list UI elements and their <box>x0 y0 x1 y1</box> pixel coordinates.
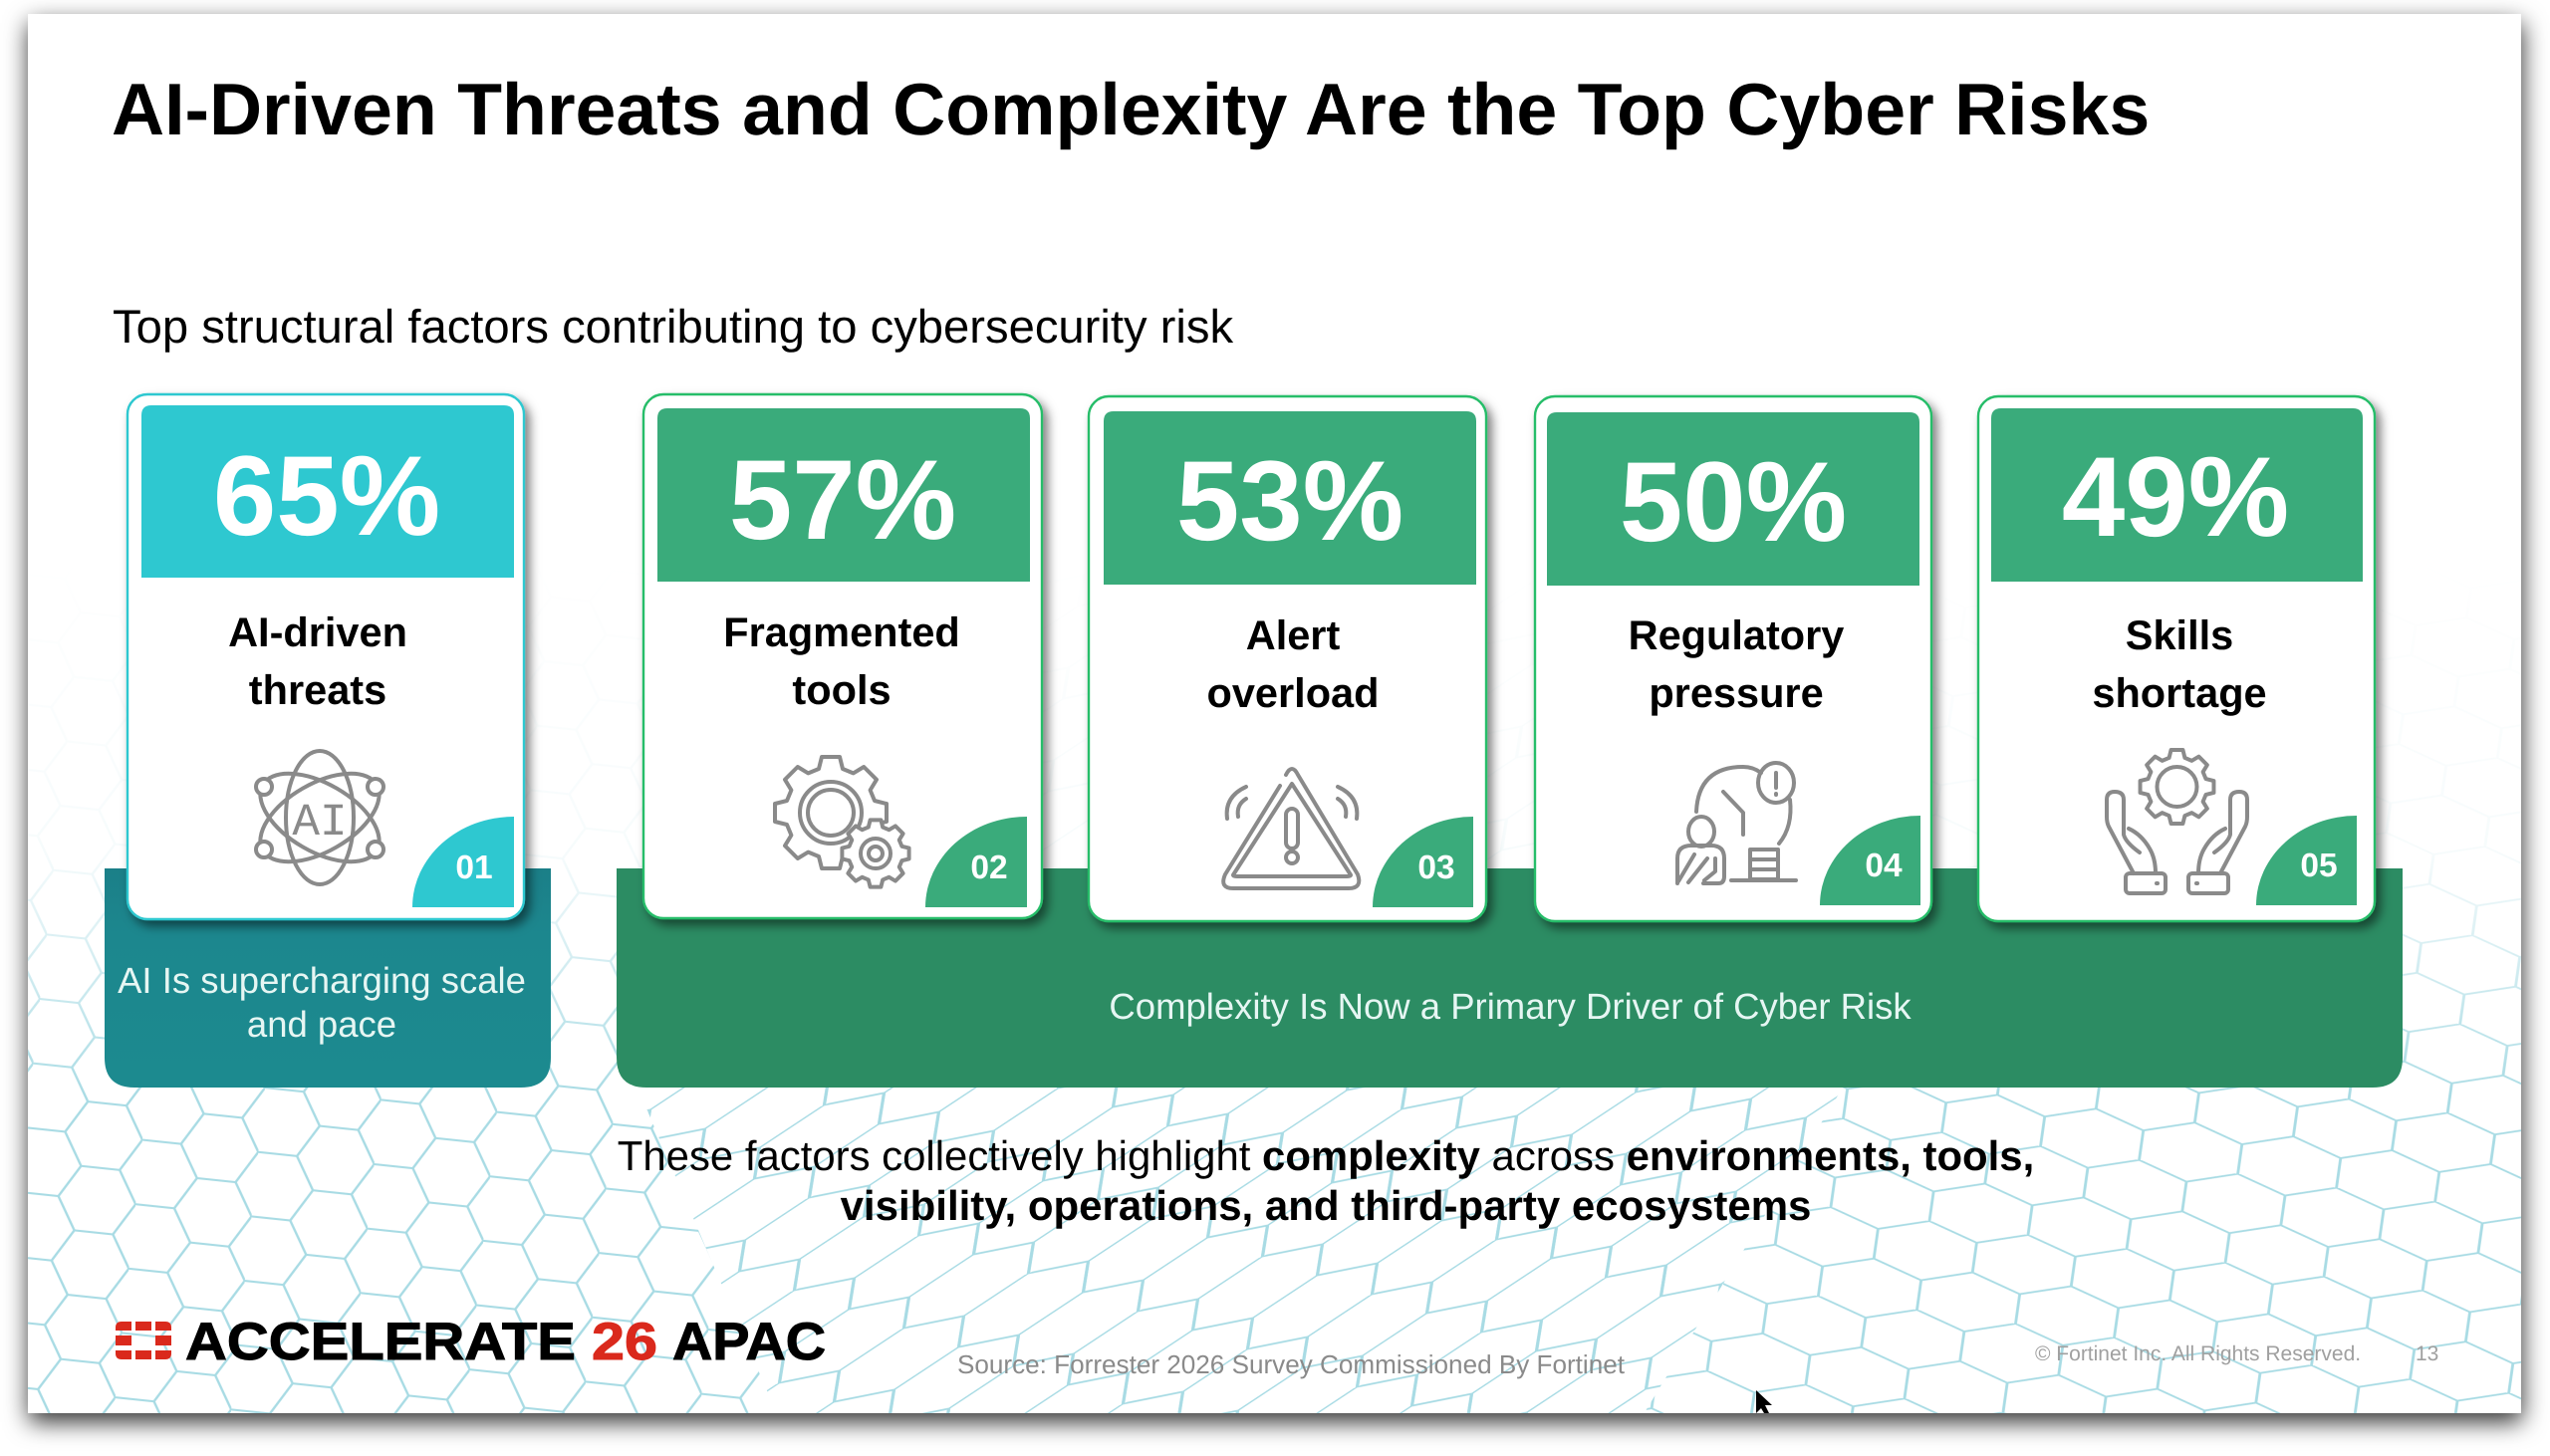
page number: 13 <box>2416 1342 2438 1365</box>
card 02: Fragmented tools: 02 <box>970 849 1008 886</box>
card 05: Skills shortage <box>1978 396 2375 921</box>
card 04: Regulatory pressure: 04 <box>1865 848 1903 884</box>
icon: person under pressure <box>1677 763 1796 883</box>
card 04: Regulatory pressure: Regulatory <box>1629 611 1844 658</box>
card 03: Alert overload: Alert <box>1246 611 1340 658</box>
panel: complexity base band: Complexity Is Now a Primary Driver of Cyber Risk <box>1109 986 1912 1027</box>
card 05: Skills shortage: Skills <box>2126 611 2233 658</box>
icon: hands holding gear <box>2107 750 2247 893</box>
icon: alert triangle <box>1223 769 1359 888</box>
panel: AI base band: AI Is supercharging scale <box>118 960 526 1001</box>
card 05: Skills shortage: 49% <box>2062 434 2289 561</box>
card 04: Regulatory pressure: pressure <box>1649 669 1824 716</box>
mouse cursor <box>1756 1390 1772 1413</box>
source note: Source: Forrester 2026 Survey Commissioned By Fortinet <box>957 1349 1626 1379</box>
card 02: Fragmented tools: 57% <box>729 437 956 564</box>
card 01: AI-driven threats: threats <box>249 666 386 713</box>
card 04: Regulatory pressure <box>1535 396 1931 921</box>
card 03: Alert overload <box>1089 396 1486 921</box>
logo: Accelerate 26 APAC: APAC <box>672 1313 826 1371</box>
card 03: Alert overload: overload <box>1207 669 1379 716</box>
card 05: Skills shortage: shortage <box>2092 669 2267 716</box>
icon: AI atom: AI <box>292 797 348 849</box>
card 01: AI-driven threats: AI-driven <box>228 608 407 655</box>
card 03: Alert overload: 03 <box>1417 849 1455 886</box>
card 05: Skills shortage: 05 <box>2300 848 2338 884</box>
logo: Accelerate 26 APAC: 26 <box>592 1313 657 1371</box>
card 02: Fragmented tools: tools <box>792 666 892 713</box>
summary text line 2: visibility, operations, and third-party ecosystems <box>841 1182 1811 1229</box>
card 01: AI-driven threats: 01 <box>455 849 493 886</box>
subtitle: Top structural factors contributing to cybersecurity risk <box>113 301 1233 354</box>
icon: gears <box>775 757 909 887</box>
logo: Accelerate 26 APAC <box>116 1313 826 1371</box>
title: AI-Driven Threats and Complexity Are the Top Cyber Risks <box>112 68 2150 150</box>
panel: AI base band: and pace <box>247 1004 396 1045</box>
icon: AI atom <box>246 751 393 884</box>
card 02: Fragmented tools: Fragmented <box>723 608 960 655</box>
panel: AI base band <box>105 868 551 1088</box>
panel: complexity base band <box>617 868 2403 1088</box>
card 04: Regulatory pressure: 50% <box>1620 439 1847 566</box>
card 02: Fragmented tools <box>643 394 1042 918</box>
summary text: These factors collectively highlight complexity across environments, tools, <box>618 1132 2034 1179</box>
card 03: Alert overload: 53% <box>1176 438 1403 565</box>
card 01: AI-driven threats <box>128 394 524 919</box>
icon: Fortinet grid mark <box>116 1322 171 1359</box>
logo: Accelerate 26 APAC: ACCELERATE <box>185 1313 576 1371</box>
card 01: AI-driven threats: 65% <box>213 433 440 560</box>
copyright: © Fortinet Inc. All Rights Reserved. <box>2035 1342 2361 1365</box>
